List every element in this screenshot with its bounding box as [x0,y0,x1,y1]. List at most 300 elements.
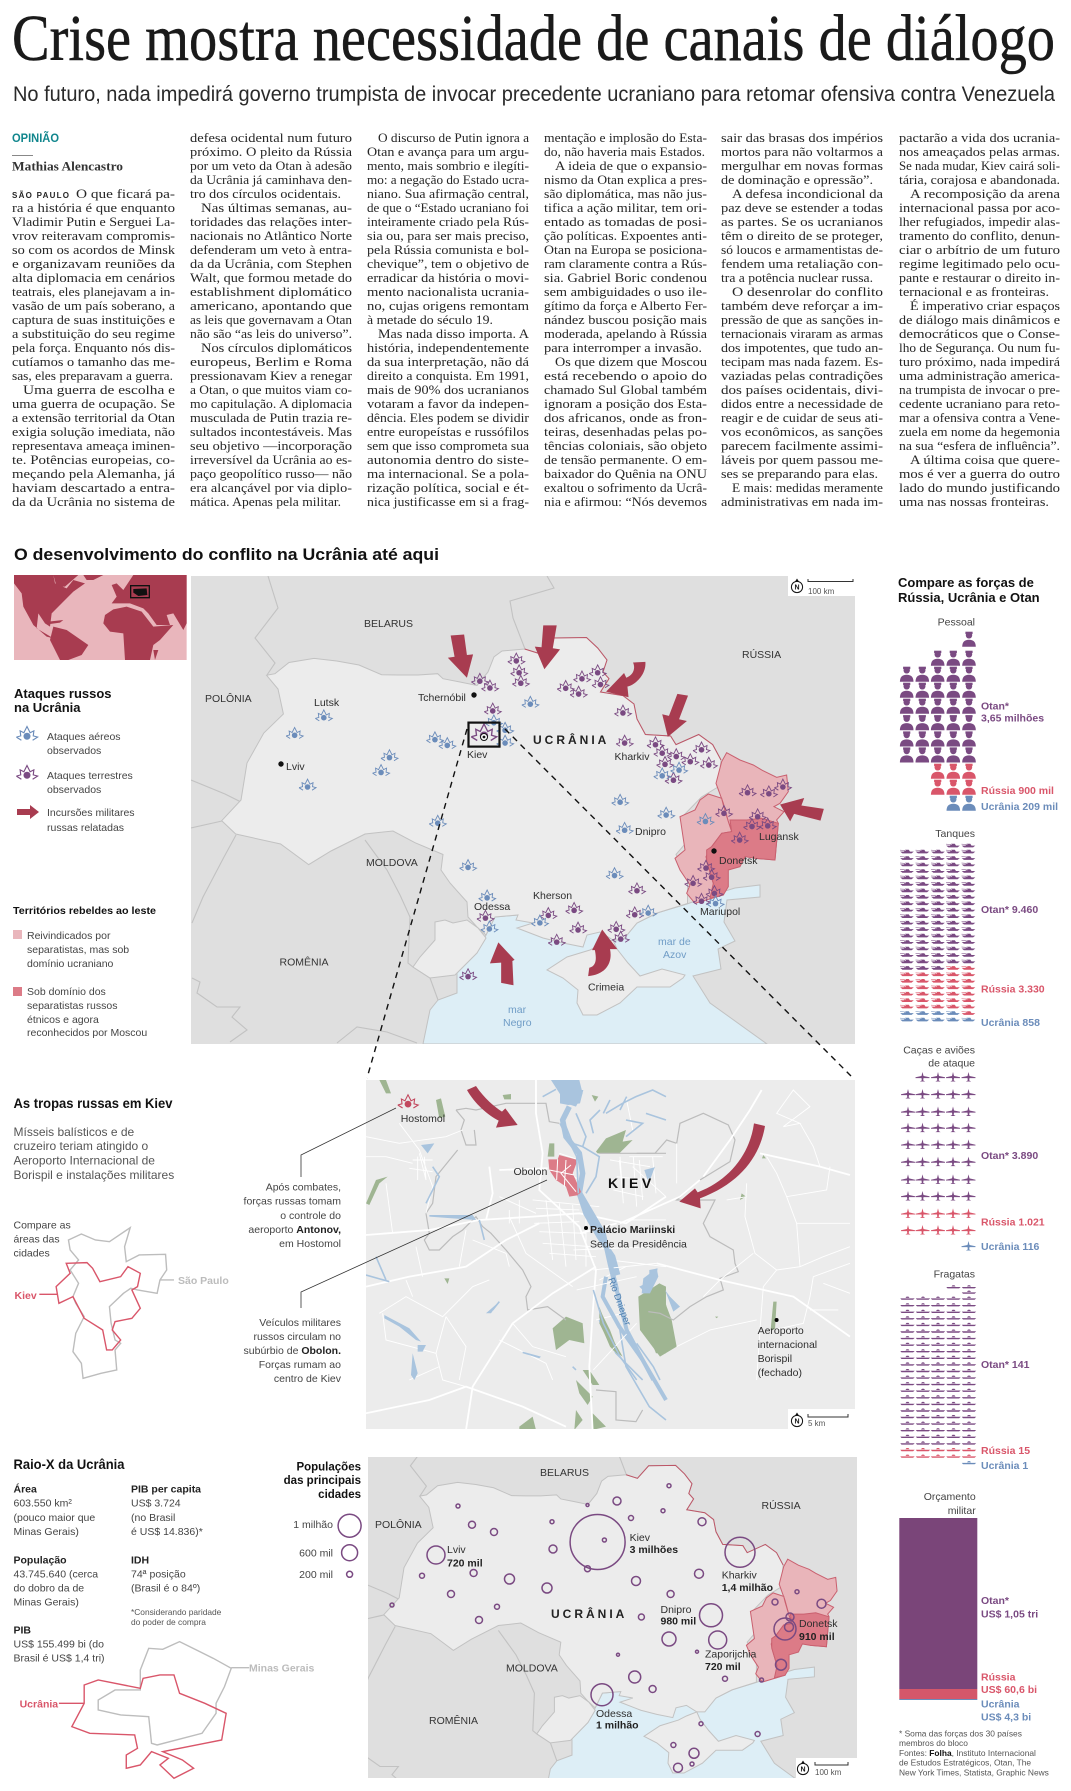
column 1: teatrais, eles planejavam a in- [12,284,175,299]
column 4: sem ambiguidades o uso ile- [544,284,707,299]
ground attacks [460,653,791,980]
column 5: têm o direito de se proteger, [721,228,883,243]
column 6: A última coisa que quere- [910,452,1060,467]
column 1: haviam descartado a entra- [12,480,175,495]
chart: frigates: Ucrânia 1 [981,1460,1028,1472]
column 5: tra a potência nuclear russa. [721,270,873,285]
column 4: mentação e implosão do Esta- [544,130,707,145]
opinion article text [12,130,1060,509]
column 6: ciar o arbítrio de um futuro [899,242,1060,257]
column 3: no, cujas origens remontam [367,298,529,313]
map labels: Donetsk [719,855,758,867]
section tag: opinião: OPINIÃO [12,132,59,145]
chart: military budget [899,1491,1038,1724]
chart: military budget: Orçamento [924,1491,976,1503]
Kiev map labels: Palácio Mariinski [590,1224,675,1236]
chart: fighter planes: Caças e aviões [903,1044,975,1056]
column 1: pela força. Enquanto nós dis- [12,340,175,355]
column 3: dência. Eles podem se dividir [367,410,530,425]
legend: city populations: 200 mil [299,1569,333,1581]
east half of Kiev map [560,1090,850,1380]
column 2: americano, apontando que [190,298,352,313]
column 1: uma guerra de ocupação. Se [12,396,175,411]
chart: fighter planes: de ataque [928,1058,975,1070]
area comparison: Ukraine vs Minas Gerais [20,1642,315,1778]
area comparison: Kiev vs São Paulo [14,1220,229,1378]
column 3: de que o “Estado ucraniano foi [367,200,529,215]
column 5 [721,130,883,509]
fact: area: Área [14,1482,37,1496]
legend: russian attacks [14,686,135,834]
attack icons [286,625,824,985]
map labels: Kharkiv [614,751,650,763]
column 1: exigia solução imediata, não [12,424,175,439]
column 1: cutíamos o tamanho das me- [12,354,175,369]
column 4: de tensão permanente. O em- [544,452,707,467]
population map labels: 1,4 milhão [722,1582,773,1594]
column 5: dos impotentes, que tudo an- [721,340,883,355]
callout: Hostomol: em Hostomol [279,1238,341,1250]
chart: personnel: Otan* [981,700,1010,712]
Kiev marker [468,723,500,747]
panel heading: Rússia, Ucrânia e Otan [898,590,1040,605]
column 4: baixador do Quênia na ONU [544,466,708,481]
fact: GDP per capita: PIB per capita [131,1484,201,1496]
column 5: administrativas em nada im- [721,494,883,509]
population map labels: UCRÂNIA [551,1606,627,1621]
population map labels: Odessa [596,1708,632,1720]
column 5: fendem uma retaliação con- [721,256,883,271]
footnote and sources: de Estudos Estratégicos, Otan, The [899,1758,1031,1768]
callout: Obolon: Veículos militares [259,1317,341,1329]
column 6: lher refugiados, impedir alas- [899,214,1060,229]
column 1: ra a história é que enquanto [12,200,175,215]
fact: GDP per capita: (no Brasil [131,1512,175,1524]
column 5: mortos para não voltarmos a [721,144,883,159]
chart: personnel: 3,65 milhões [981,712,1044,724]
area comparison: Kiev vs São Paulo: Compare as [14,1220,71,1232]
callout: Hostomol: aeroporto Antonov, [248,1224,341,1236]
column 5: paz deve se estender a todas [721,200,883,215]
callout: Obolon: centro de Kiev [274,1373,342,1385]
column 2: mática. Apenas pela militar. [190,494,341,509]
column 5: ses se preparando para elas. [721,466,878,481]
swatch: claimed [13,930,22,939]
column 5: só loucos e armamentistas de- [721,242,883,257]
compass and scale [788,576,855,596]
label: incursions: russas relatadas [47,822,124,834]
compass and scale: 100 km [815,1768,842,1777]
population map labels: Kharkiv [722,1570,757,1582]
legend: city populations: 1 milhão [293,1519,333,1531]
compass and scale [788,1409,855,1429]
column 2 [190,130,353,509]
column 2: da da Ucrânia, com Stephen [190,256,353,271]
column 1 [12,155,176,509]
callout: Hostomol: Após combates, [266,1182,341,1194]
column 6: mos é ver a guerra do outro [899,466,1060,481]
column 1: da da Ucrânia no sistema de [12,494,175,509]
legend: city populations: cidades [318,1489,361,1501]
column 5: reagir e de cuidar de seus ati- [721,410,883,425]
legend: city populations: das principais [284,1475,361,1487]
footnote: do poder de compra [131,1617,206,1627]
column 4: tências coloniais, são objeto [544,438,707,453]
compass and scale [796,1758,857,1778]
legend title: Ataques russos [14,686,112,701]
column 2: musculada de Putin trazia re- [190,410,352,425]
chart: personnel: Pessoal [938,616,975,628]
column 3: inteiramente criado pela Rús- [367,214,529,229]
column 4: moderada, apelando à Rússia [544,326,707,341]
column 4: ram claramente contra a Rús- [544,256,707,271]
population map labels: 720 mil [705,1661,741,1673]
footnote and sources: membros do bloco [899,1738,968,1748]
column 3: à metade do século 19. [367,312,493,327]
column 1: captura de suas instituições e [12,312,175,327]
Kiev map labels [401,1113,817,1379]
column 4: tifica a ação militar, tem ori- [544,200,707,215]
column 2: seu objetivo —incorporação [190,438,352,453]
column 5: vos econômicos, as sanções [721,424,883,439]
legend: city populations: 600 mil [299,1548,333,1560]
map labels: RÚSSIA [742,648,781,661]
map labels: Lugansk [759,831,799,843]
column 5: vaziadas pelas contradições [721,368,883,383]
population map labels: Zaporijchia [705,1648,757,1660]
chart: personnel: Ucrânia 209 mil [981,801,1058,813]
column 2: europeus, Berlim e Roma [190,354,352,369]
label: air attacks: Ataques aéreos [47,731,121,743]
chart: tanks: Tanques [935,828,975,840]
panel heading: Compare as forças de [898,575,1034,590]
legend: city populations [284,1462,361,1581]
column 5: A defesa incondicional da [732,186,883,201]
column 5: pressão de que as sanções in- [721,312,883,327]
fact: population: 43.745.640 (cerca [14,1568,98,1580]
fact: HDI: IDH [131,1554,149,1566]
column 1: a extensão territorial da Otan [12,410,176,425]
column 6: uma nas nossas fronteiras. [899,494,1049,509]
column 6: cedente ucraniano para reto- [899,396,1060,411]
area comparison: Ukraine vs Minas Gerais: Ucrânia [20,1698,58,1710]
chart: fighter planes: Otan* 3.890 [981,1150,1038,1162]
icon: Hostomol attack [398,1095,418,1108]
population map labels: RÚSSIA [762,1499,801,1512]
column 2: defenderam um veto à entra- [190,242,352,257]
chart: frigates: Rússia 15 [981,1445,1030,1457]
column 2: da Ucrânia já caminhava den- [190,172,352,187]
Kiev map labels: Obolon [514,1166,548,1178]
chart: fighter planes: Rússia 1.021 [981,1216,1045,1228]
chart: frigates: Fragatas [934,1268,975,1280]
heading and intro: troops in Kiev: Borispil e instalações militares [14,1168,174,1182]
map labels: Kherson [533,890,572,902]
footnote: *Considerando paridade [131,1607,222,1617]
chart: military budget: Rússia [981,1672,1016,1684]
map labels: Azov [663,949,687,961]
callout: Obolon: Forças rumam ao [259,1359,341,1371]
main map of Ukraine [191,576,855,1044]
column 2: as leis que governavam a Otan [190,312,352,327]
panel: forces comparison [898,575,1058,1778]
column 5: O desenrolar do conflito [732,284,883,299]
column 1: Vladimir Putin e Serguei La- [12,214,175,229]
legend title: Territórios rebeldes ao leste [13,905,156,917]
fact: HDI: 74ª posição [131,1568,186,1580]
fact: GDP: Brasil é US$ 1,4 tri) [14,1652,105,1664]
column 6: zuela em nome da hegemonia [899,424,1060,439]
swatch: controlled [13,987,22,996]
column 5: parecem facilmente assimi- [721,438,883,453]
heading: Raio-X da Ucrânia [14,1456,125,1472]
chart: military budget: Ucrânia [981,1698,1020,1710]
column 3: chevique”, tem o objetivo de [367,256,529,271]
column 3: autonomia dentro do siste- [367,452,529,467]
compass and scale: 5 km [808,1419,826,1428]
label: claimed: Reivindicados por [27,930,111,942]
chart: tanks: Ucrânia 858 [981,1017,1040,1029]
chart: personnel: Rússia 900 mil [981,785,1054,797]
column 4: ção políticas. Expoentes anti- [544,228,707,243]
column 4: nia e afirmou: “Nós devemos [544,494,707,509]
column 5: didos entre a necessidade de [721,396,883,411]
column 1: so com os acordos de Minsk [12,242,176,257]
column 6: pactarão a vida dos ucrania- [899,130,1060,145]
population map labels: ROMÊNIA [429,1714,478,1727]
icon: ground attacks [16,766,38,779]
column 4: A ideia de que o expansio- [555,158,707,173]
legend title: na Ucrânia [14,700,81,715]
column 5: láveis por quem passou me- [721,452,883,467]
column 4: nández buscou posição mais [544,312,707,327]
legend: city populations: Populações [296,1462,361,1474]
map labels: Negro [503,1017,532,1029]
column 6: na trumpista de invocar o pre- [899,382,1060,397]
column 5: as partes. Se os ucranianos [721,214,883,229]
population map labels: 910 mil [799,1631,835,1643]
fact: GDP per capita: US$ 3.724 [131,1498,181,1510]
map labels: Mariupol [700,906,740,918]
column 3: mo: a negação do Estado ucra- [367,172,529,187]
column 3: rização política, social e ét- [367,480,529,495]
fact: GDP: PIB [14,1624,31,1636]
Kiev map labels: Rio Dnieper [605,1276,633,1327]
column 1: te. Potências europeias, co- [12,452,175,467]
column 2: não são “as leis do universo”. [190,326,352,341]
Kiev map labels: Borispil [758,1353,792,1365]
callout: Hostomol: forças russas tomam [244,1196,341,1208]
icon: incursion arrow [17,805,39,819]
label: claimed: separatistas, mas sob [27,944,129,956]
column 6: turo próximo, nada impedirá [899,354,1060,369]
Kiev map labels: (fechado) [758,1367,802,1379]
legend: rebel territories [13,905,156,1039]
map labels: Tchernóbil [418,692,466,704]
population map labels: Donetsk [799,1618,838,1630]
column 2: toridades das relações inter- [190,214,352,229]
column 2: tro dos círculos ocidentais. [190,186,341,201]
chart: tanks: Rússia 3.330 [981,984,1045,996]
column 2: paço geopolítico russo— não [190,466,352,481]
map labels [205,618,799,1029]
column 6: lho de Segurança. Ou num fu- [899,340,1060,355]
column 3: nica justificasse em si a frag- [367,494,529,509]
column 2: a Otan, o que muitos viam co- [190,382,352,397]
population map labels: POLÔNIA [375,1518,422,1531]
air attacks [286,696,724,932]
compass and scale: 100 km [808,587,835,596]
population map labels: Dnipro [660,1604,692,1616]
column 5: tecipam mas nada fazem. Es- [721,354,883,369]
chart: fighter planes: Ucrânia 116 [981,1241,1040,1253]
column 2: próximo. O pleito da Rússia [190,144,352,159]
icon: air attacks [16,726,38,740]
column 6: pante e restaurar o direito in- [899,270,1060,285]
label: ground attacks: observados [47,784,101,796]
population map labels: BELARUS [540,1467,589,1479]
column 6: internacional passa por aco- [899,200,1060,215]
area comparison: Ukraine vs Minas Gerais: Minas Gerais [249,1662,315,1674]
column 3: mento, mais sombrio e ilegíti- [367,158,529,173]
column 4: Otan na Europa se posiciona- [544,242,707,257]
population map labels: 3 milhões [630,1544,678,1556]
column 6: mar a ofensiva contra a Vene- [899,410,1060,425]
column 5: de dominação e opressão”. [721,172,873,187]
chart: military budget: US$ 60,6 bi [981,1684,1037,1696]
column 6: regime legitimado pelo ocu- [899,256,1060,271]
Kiev map labels: Sede da Presidência [590,1238,687,1250]
column 4: entado as tomadas de posi- [544,214,707,229]
area comparison: Kiev vs São Paulo: cidades [14,1248,50,1260]
heading and intro: troops in Kiev: Aeroporto Internacional de [14,1154,155,1168]
column 3: sem que isso comprometa sua [367,438,529,453]
column 3: ma internacional. Se a pola- [367,466,529,481]
map labels: BELARUS [364,618,413,630]
column 3: votaram a favor da indepen- [367,396,529,411]
fact: GDP per capita: é US$ 14.836)* [131,1526,203,1538]
map labels: POLÔNIA [205,692,252,705]
column 1: O que ficará pa- [76,186,175,201]
column 2: establishment diplomático [190,284,352,299]
Kiev map labels: Aeroporto [758,1325,804,1337]
label: controlled: separatistas russos [27,1000,117,1012]
population map labels: 1 milhão [596,1720,639,1732]
column 6: tramento do conflito, denun- [899,228,1060,243]
label: controlled: Sob domínio dos [27,986,106,998]
column 4: ignoram a posição dos Esta- [544,396,707,411]
column 3: niano. Sua afirmação central, [367,186,529,201]
callout: Hostomol: o controle do [280,1210,341,1222]
heading and intro: troops in Kiev [14,1095,174,1182]
fact: GDP: US$ 155.499 bi (do [14,1638,104,1650]
column 4: chamado Sul Global também [544,382,707,397]
label: controlled: reconhecidos por Moscou [27,1027,147,1039]
column 4: Os que dizem que Moscou [555,354,708,369]
column 5: dos países ocidentais, divi- [721,382,883,397]
map labels: Lutsk [314,697,340,709]
column 1: alta diplomacia em cenários [12,270,175,285]
column 3: entre europeístas e russófilos [367,424,529,439]
area comparison: Kiev vs São Paulo: Kiev [14,1290,37,1302]
column 4 [544,130,708,509]
map labels: UCRÂNIA [533,732,609,747]
label: controlled: étnicos e agora [27,1014,99,1026]
callout: Obolon: subúrbio de Obolon. [244,1345,341,1357]
column 2: defesa ocidental num futuro [190,130,352,145]
column 5: sair das brasas dos impérios [721,130,883,145]
map labels: Kiev [467,749,488,761]
heading: conflict development: O desenvolvimento do conflito na Ucrânia até aqui [14,545,439,564]
label: claimed: domínio ucraniano [27,958,114,970]
column 1: e organizavam reuniões da [12,256,175,271]
column 6: ternacional e as fronteiras. [899,284,1049,299]
area comparison: Kiev vs São Paulo: áreas das [14,1234,60,1246]
map labels: mar de [658,936,691,948]
column 1: a substituição do seu regime [12,326,175,341]
heading and intro: troops in Kiev: cruzeiro teriam atingido o [14,1139,149,1153]
map labels: ROMÊNIA [280,956,329,968]
footnote and sources: Fontes: Folha, Instituto Internacional [899,1748,1036,1758]
column 4: são diplomática, mas não jus- [544,186,707,201]
fact: area: (pouco maior que [14,1512,95,1524]
column 6: na sua “esfera de influência”. [899,438,1060,453]
label: air attacks: observados [47,745,101,757]
column 4: sia. Gabriel Boric condenou [544,270,708,285]
column 6: É imperativo criar espaços [910,298,1060,313]
column 2: Walt, que formou metade do [190,270,352,285]
column 6: nos ameaçados pelas armas. [899,144,1060,159]
footnote and sources: * Soma das forças dos 30 países [899,1728,1022,1738]
map labels: mar [508,1004,527,1016]
fact: HDI: (Brasil é o 84º) [131,1582,200,1594]
population map labels: Lviv [447,1544,466,1556]
column 3: da sua interpretação, não dá [367,354,529,369]
column 4: dos africanos, onde as fron- [544,410,707,425]
heading and intro: troops in Kiev: Mísseis balísticos e de [14,1125,135,1139]
column 2: nacionais no Atlântico Norte [190,228,352,243]
column 2: sultados incontestáveis. Mas [190,424,352,439]
chart: fighter planes [901,1044,1045,1253]
label: ground attacks: Ataques terrestres [47,770,133,782]
column 3: direito a conquista. Em 1991, [367,368,529,383]
chart: military budget: US$ 4,3 bi [981,1712,1031,1724]
Kiev map [366,1080,855,1430]
column 6: de diálogo mais dinâmicos e [899,312,1060,327]
column 1: representava ameaça iminen- [12,438,175,453]
fact: area: Minas Gerais) [14,1526,79,1538]
column 5: mergulhar em novas formas [721,158,883,173]
byline: Mathias Alencastro [12,160,123,174]
column 6: lado do mundo justificando [899,480,1060,495]
city circles [390,1484,826,1772]
chart: military budget: Otan* [981,1595,1010,1607]
column 3: história, independentemente [367,340,529,355]
west half of Kiev map [366,1080,666,1430]
callout: Obolon: russos circulam no [253,1331,341,1343]
column 4: teiras, desenhadas pelas po- [544,424,707,439]
column 6: Se nada mudar, Kiev cairá soli- [899,158,1060,173]
column 1: SÃO PAULO [12,191,69,200]
callout: Obolon [244,1180,547,1385]
fact: population: População [14,1554,67,1566]
column 6: tária, corajosa e abandonada. [899,172,1060,187]
column 2: pressionavam Kiev a renegar [190,368,353,383]
map labels: Crimeia [588,982,624,994]
column 4: está recebendo o apoio do [544,368,707,383]
column 4: para interromper a invasão. [544,340,702,355]
column 3: mento nacionalista ucrania- [367,284,529,299]
